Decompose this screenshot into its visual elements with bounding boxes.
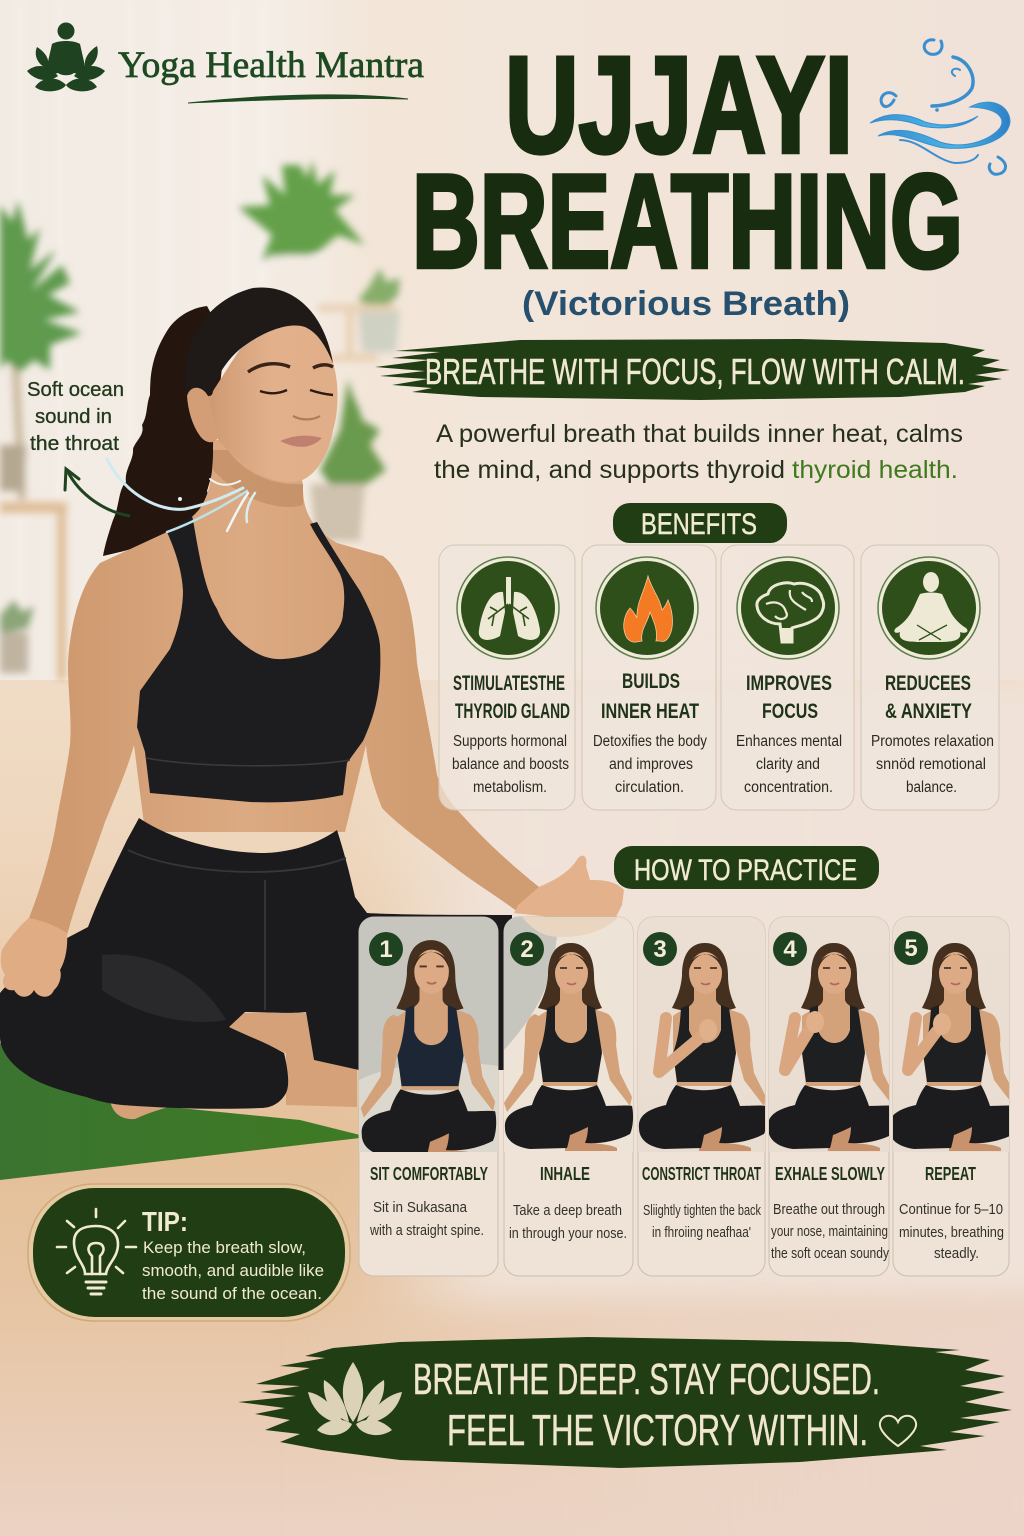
panel: benefit focus: IMPROVES: [746, 672, 832, 695]
panel: step 3: Sliightly tighten the back: [643, 1202, 761, 1219]
body skin: [29, 440, 539, 935]
panel: benefit inner heat: Detoxifies the body: [593, 733, 707, 750]
crop top: [137, 516, 380, 802]
panel: benefit focus: Enhances mental: [736, 733, 842, 750]
panel: benefit stimulates thyroid: [439, 545, 575, 810]
badge: 5: [904, 935, 918, 962]
icon: meditating figure: [878, 557, 980, 659]
panel: step 1: Sit in Sukasana: [373, 1199, 468, 1216]
badge: 1: [379, 936, 393, 963]
logo wordmark: Yoga Health Mantra: [118, 45, 424, 86]
panel: step 1: with a straight spine.: [369, 1222, 484, 1239]
badge: [894, 931, 928, 965]
panel: step 4: [768, 917, 896, 1276]
leggings: [0, 818, 512, 1109]
panel: benefit stimulates thyroid: THYROID GLAND: [455, 700, 570, 723]
hand on chest: [908, 1013, 951, 1070]
main illustration: meditating woman: [0, 287, 624, 1119]
tagline text: the mind, and supports thyroid: [434, 456, 785, 484]
panel: step 4: EXHALE SLOWLY: [775, 1163, 885, 1184]
panel: benefit inner heat: circulation.: [615, 779, 684, 796]
icon: lungs: [457, 557, 559, 659]
panel: benefit focus: concentration.: [744, 779, 833, 796]
icon: heart: [880, 1416, 916, 1446]
panel: step 2: in through your nose.: [509, 1225, 627, 1242]
logo icon: meditating figure with leaves: [27, 22, 105, 91]
callout: ocean sound: [27, 378, 255, 532]
panel: benefit stimulates thyroid: balance and boosts: [452, 756, 569, 773]
callout: tip: TIP:: [142, 1206, 188, 1237]
heading: benefits: BENEFITS: [641, 508, 757, 541]
panel: step 5: [889, 917, 1017, 1276]
banner: slogan: [375, 339, 1010, 400]
badge: 3: [653, 936, 667, 963]
tagline text: A powerful breath that builds inner heat, calms: [436, 420, 963, 448]
callout: ocean sound: the throat: [30, 432, 119, 455]
panel: step 2: INHALE: [540, 1163, 590, 1184]
head: [185, 287, 338, 482]
badge: [510, 932, 544, 966]
title: [412, 29, 963, 296]
panel: step 3: [638, 917, 767, 1276]
floor: [0, 680, 1024, 1536]
icon: water swirl: [870, 40, 1010, 174]
arm on chest: [659, 1018, 717, 1072]
hand on throat: [785, 1011, 824, 1070]
callout: ocean sound: sound in: [35, 405, 112, 428]
panel: benefit anxiety: Promotes relaxation: [871, 733, 994, 750]
tagline text: thyroid health.: [792, 456, 958, 484]
blurred plants: [0, 160, 400, 680]
panel: step 4: your nose, maintaining: [771, 1223, 888, 1240]
panel: step 3: in fhroiing neafhaa': [652, 1224, 751, 1241]
panel: benefit stimulates thyroid: Supports hormonal: [453, 733, 567, 750]
badge: [643, 932, 677, 966]
logo underline: [188, 95, 408, 103]
panel: step 5: Continue for 5–10: [899, 1201, 1003, 1218]
panel: benefit inner heat: [582, 545, 716, 810]
callout: ocean sound: Soft ocean: [27, 378, 124, 401]
banner: closing message: [238, 1337, 1012, 1468]
right hand: [514, 856, 624, 918]
heading: how to practice: HOW TO PRACTICE: [634, 854, 857, 887]
panel: benefit focus: FOCUS: [762, 700, 818, 723]
heading: how to practice: [614, 846, 879, 889]
panel: step 1: SIT COMFORTABLY: [370, 1163, 488, 1184]
yoga mat: [0, 1043, 360, 1180]
heading: benefits: [613, 503, 787, 543]
panel: benefit focus: [721, 545, 854, 810]
panel: step 1: [359, 917, 498, 1276]
panel: benefit anxiety: [861, 545, 999, 810]
panel: step 5: steadly.: [934, 1245, 979, 1262]
panel: benefit stimulates thyroid: STIMULATESTHE: [453, 672, 565, 695]
callout: tip: [28, 1184, 350, 1321]
arrow: [65, 469, 130, 516]
logo: [27, 22, 424, 103]
panel: benefit anxiety: balance.: [906, 779, 957, 796]
icon: light bulb: [57, 1209, 136, 1294]
panel: benefit anxiety: REDUCEES: [885, 672, 971, 695]
panel: benefit inner heat: INNER HEAT: [601, 700, 699, 723]
ponytail: [103, 306, 225, 556]
panel: benefit stimulates thyroid: metabolism.: [473, 779, 547, 796]
icon: lotus: [308, 1362, 402, 1435]
breath flow lines: [107, 459, 255, 532]
leg skin and feet: [229, 1013, 357, 1107]
panel: benefit anxiety: snnöd remotional: [876, 756, 986, 773]
panel: step 3: CONSTRICT THROAT: [642, 1163, 761, 1184]
callout: tip: Keep the breath slow,: [143, 1238, 306, 1257]
badge: [773, 932, 807, 966]
panel: step 4: the soft ocean soundy: [771, 1245, 889, 1262]
left hand: [1, 918, 67, 997]
panel: step 2: [504, 917, 633, 1276]
panel: step 5: REPEAT: [925, 1163, 976, 1184]
tagline text: [434, 420, 963, 484]
panel: step 5: minutes, breathing: [899, 1224, 1004, 1241]
panel: benefit anxiety: & ANXIETY: [885, 700, 972, 723]
banner: closing message: FEEL THE VICTORY WITHIN.: [447, 1406, 868, 1455]
panel: benefit inner heat: BUILDS: [622, 670, 680, 693]
panel: step 4: Breathe out through: [773, 1201, 885, 1218]
badge: [369, 932, 403, 966]
callout: tip: the sound of the ocean.: [142, 1284, 322, 1303]
badge: 2: [520, 936, 534, 963]
subtitle: (Victorious Breath): [522, 285, 850, 323]
icon: flame: [596, 557, 698, 659]
panel: step 2: Take a deep breath: [513, 1202, 622, 1219]
badge: 4: [783, 936, 797, 963]
callout: tip: smooth, and audible like: [142, 1261, 324, 1280]
panel: benefit focus: clarity and: [756, 756, 820, 773]
panel: benefit inner heat: and improves: [609, 756, 693, 773]
icon: brain: [737, 557, 839, 659]
title: UJJAYI: [505, 29, 853, 182]
